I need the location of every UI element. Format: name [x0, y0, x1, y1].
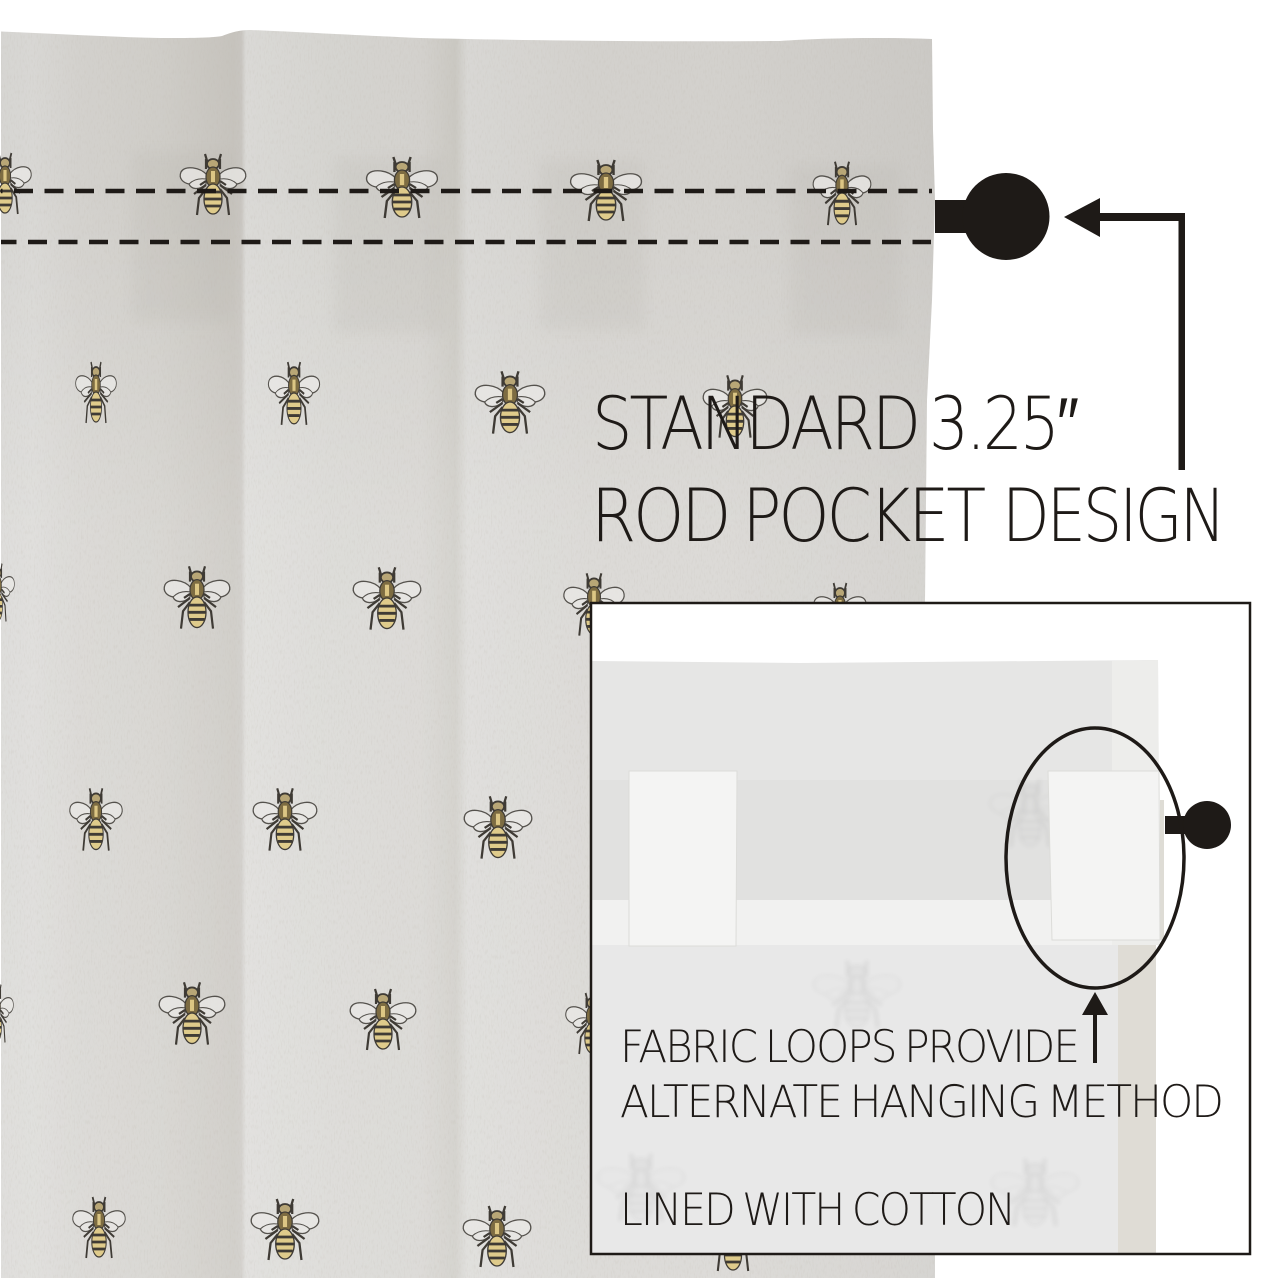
icon: small curtain rod [1165, 801, 1231, 849]
heading: standard rod pocket design: ROD POCKET [591, 474, 985, 559]
text: lined with cotton: LINED WITH COTTON [620, 1185, 1014, 1236]
icons: bee row 6 [73, 1197, 764, 1271]
upper folded hem [592, 660, 1164, 945]
icons: bee row 3 [0, 564, 866, 644]
arrow: pointing at ellipse [1082, 992, 1108, 1063]
left fabric loop [629, 771, 737, 946]
heading: standard rod pocket design: DESIGN [1002, 474, 1223, 559]
icons: bee row 2 [76, 362, 767, 438]
rod pocket bottom dashed line [1, 240, 931, 244]
icon: curtain rod [935, 173, 1050, 260]
icons: bee row 4 [70, 788, 532, 859]
heading: standard rod pocket design: 3.25″ [929, 382, 1078, 467]
lower lining [592, 945, 1156, 1253]
highlight ellipse around loop [1006, 728, 1184, 988]
heading: standard rod pocket design: STANDARD [592, 382, 918, 467]
ghost bees showing through lining [598, 780, 1078, 1226]
inset frame [591, 603, 1250, 1254]
text: fabric loops note: ALTERNATE HANGING METHOD [620, 1077, 1222, 1128]
right fabric loop [1048, 771, 1160, 940]
panel: curtain fabric [1, 30, 935, 1278]
text: fabric loops note [620, 1022, 1222, 1128]
panel: inset back view of curtain [591, 603, 1250, 1254]
icons: bee row 5 [0, 982, 618, 1054]
arrow: pointing at rod [1064, 198, 1185, 470]
icons: bee row 1 [0, 153, 871, 225]
heading: standard rod pocket design [591, 382, 1223, 559]
rod pocket top dashed line [1, 189, 932, 193]
text: fabric loops note: FABRIC LOOPS PROVIDE [620, 1022, 1078, 1073]
